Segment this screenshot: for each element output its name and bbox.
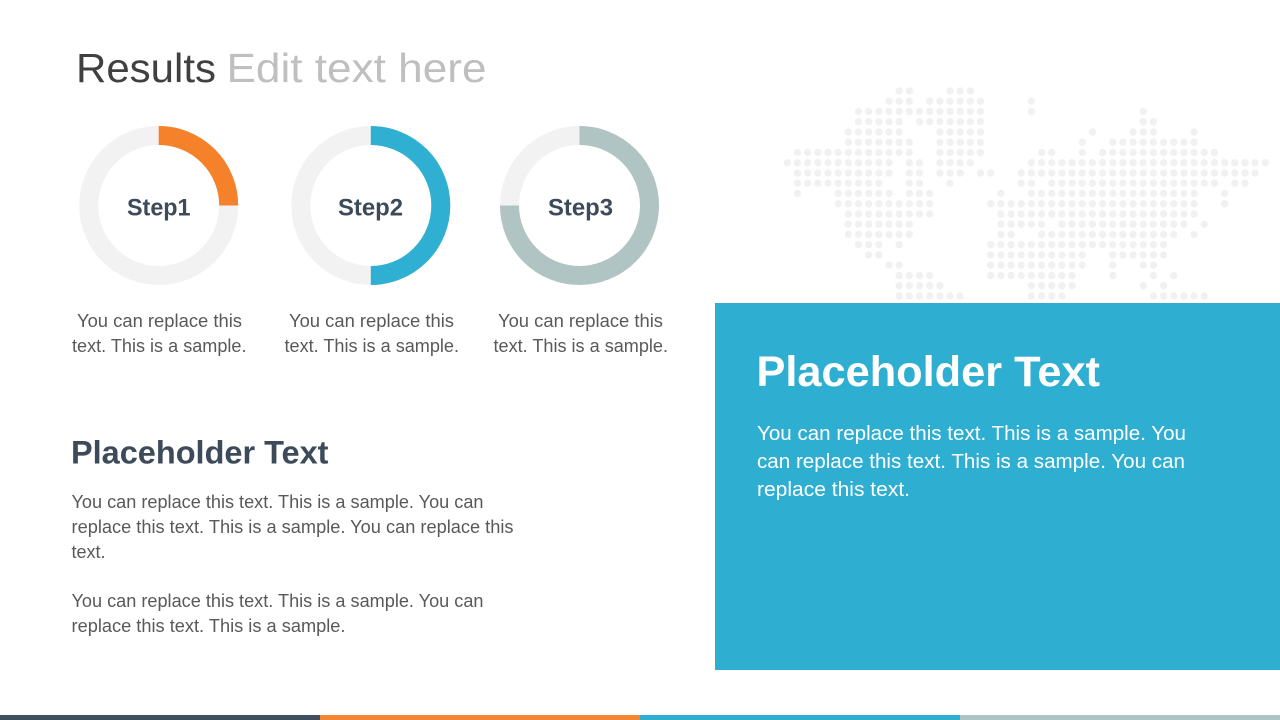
donut: step 1 at 25 percent: [89, 136, 229, 276]
callout paragraph: You can replace this text. This is a sample. You: [757, 422, 1186, 445]
step 3 caption: You can replace this: [498, 311, 663, 331]
left paragraph 2: [72, 591, 484, 636]
step 2 caption: [284, 311, 459, 356]
step 1 caption: text. This is a sample.: [72, 336, 247, 356]
left heading: Placeholder Text: [71, 434, 329, 470]
callout paragraph: [757, 422, 1186, 501]
world map dot pattern: [787, 91, 1266, 296]
panel: blue callout: [715, 303, 1280, 670]
callout paragraph: can replace this text. This is a sample. You can: [757, 450, 1185, 473]
callout paragraph: replace this text.: [757, 478, 910, 501]
left paragraph 2: replace this text. This is a sample.: [72, 616, 346, 636]
panel: step 2: [284, 136, 459, 356]
left paragraph 1: You can replace this text. This is a sample. You can: [72, 492, 484, 512]
step 3 caption: [494, 311, 668, 356]
left paragraph 1: text.: [72, 542, 106, 562]
step 1 label: Step1: [127, 194, 190, 222]
step 3 label: Step3: [548, 194, 613, 222]
left paragraph 2: You can replace this text. This is a sample. You can: [72, 591, 484, 611]
left text block: [71, 434, 514, 636]
step 2 caption: You can replace this: [289, 311, 454, 331]
donut: step 2 at 50 percent: [301, 136, 441, 276]
step 2 caption: text. This is a sample.: [284, 336, 459, 356]
left paragraph 1: [72, 492, 514, 562]
callout heading: Placeholder Text: [756, 348, 1100, 396]
donut: step 3 at 75 percent: [510, 136, 650, 276]
step 3 caption: text. This is a sample.: [494, 336, 668, 356]
bottom colour bar: [0, 715, 1280, 720]
step 1 caption: You can replace this: [77, 311, 242, 331]
title: Results: [76, 45, 216, 91]
step 2 label: Step2: [338, 194, 403, 222]
left paragraph 1: replace this text. This is a sample. You can replace this: [72, 517, 514, 537]
panel: step 3: [494, 136, 668, 356]
title: [76, 45, 486, 91]
panel: step 1: [72, 136, 247, 356]
step 1 caption: [72, 311, 247, 356]
title: Edit text here: [226, 45, 486, 91]
